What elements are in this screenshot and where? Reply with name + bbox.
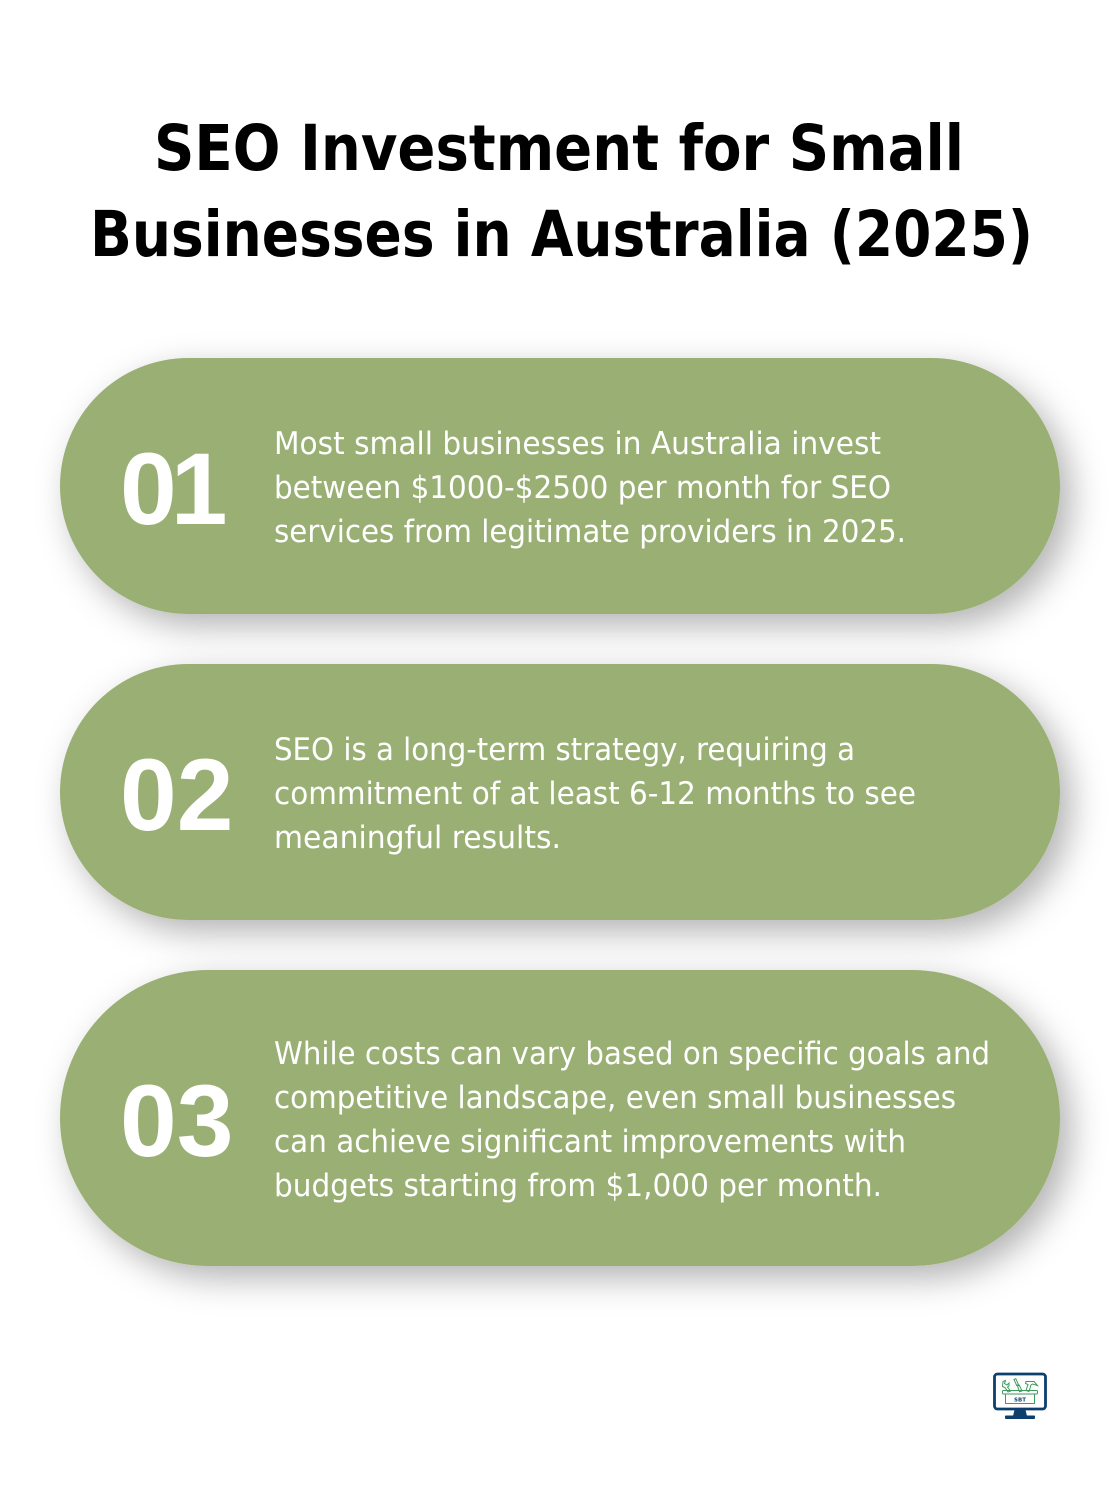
number 03: 03 [120,1064,233,1178]
text: step 03 description [274,1036,990,1204]
text: step 02 description: meaningful results. [274,820,561,856]
text: step 03 description: While costs can vary based on specific goals and [274,1036,990,1072]
icon: SBT toolbox monitor logo: SBT [1014,1398,1026,1404]
number 01: 01 [120,432,227,546]
text: step 01 description: between $1000-$2500 per month for SEO [274,470,891,506]
text: step 02 description: commitment of at least 6-12 months to see [274,776,916,812]
text: step 01 description: services from legitimate providers in 2025. [274,514,906,550]
text: step 01 description [274,426,906,550]
text: step 03 description: competitive landscape, even small businesses [274,1080,956,1116]
text: step 02 description [274,732,916,856]
panel: step 01 [60,358,1060,614]
text: step 03 description: can achieve significant improvements with [274,1124,906,1160]
panel: step 02 [60,664,1060,920]
title [90,112,1033,271]
text: step 01 description: Most small businesses in Australia invest [274,426,881,462]
text: step 03 description: budgets starting from $1,000 per month. [274,1168,882,1204]
panel: step 03 [60,970,1060,1266]
number 02: 02 [120,738,233,852]
text: step 02 description: SEO is a long-term strategy, requiring a [274,732,855,768]
title: SEO Investment for Small [154,112,964,185]
icon: SBT toolbox monitor logo [994,1374,1046,1419]
